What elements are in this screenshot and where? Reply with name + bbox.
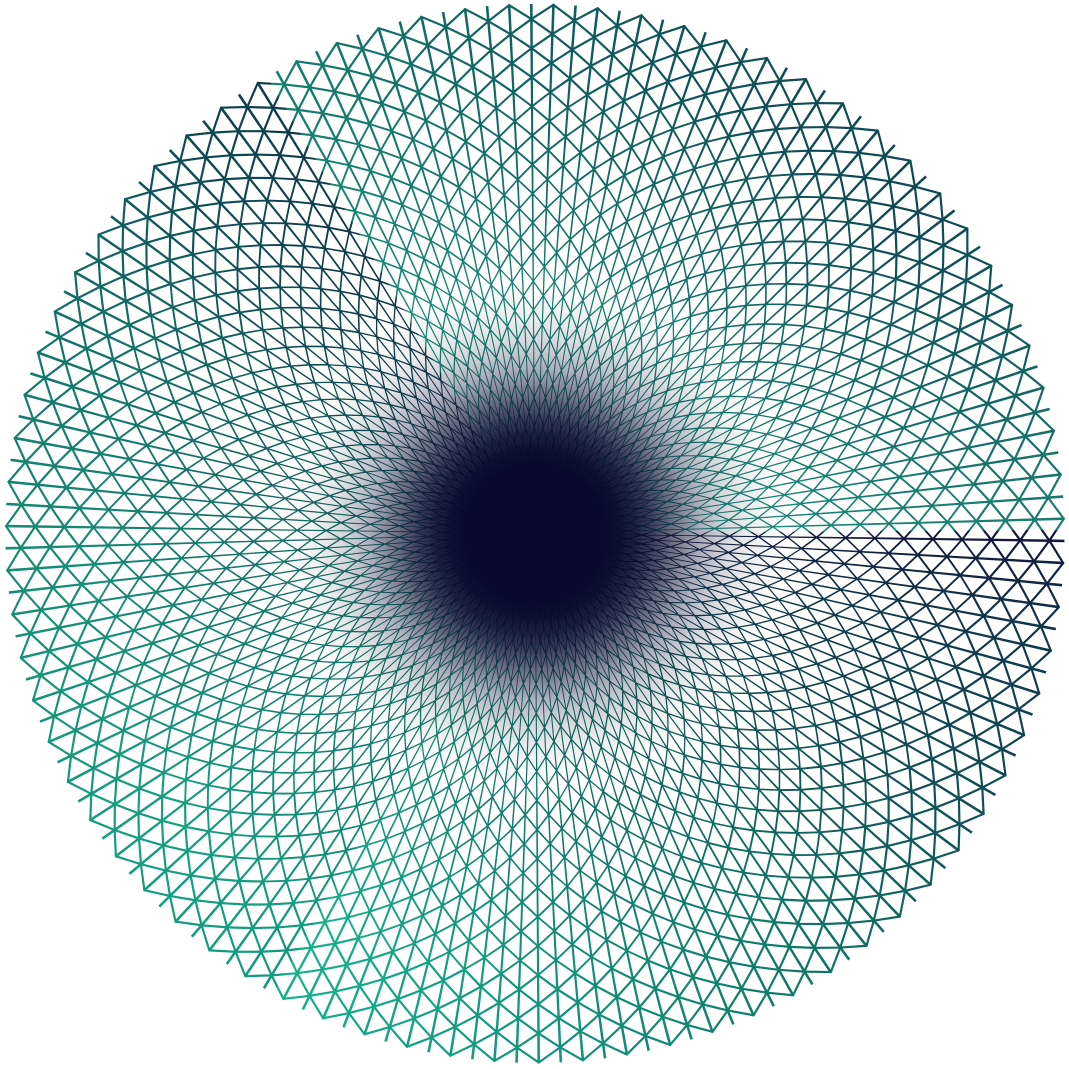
inner lightening of the top sector bbox=[352, 116, 956, 533]
inner shading of the lower sectors bbox=[140, 312, 802, 934]
